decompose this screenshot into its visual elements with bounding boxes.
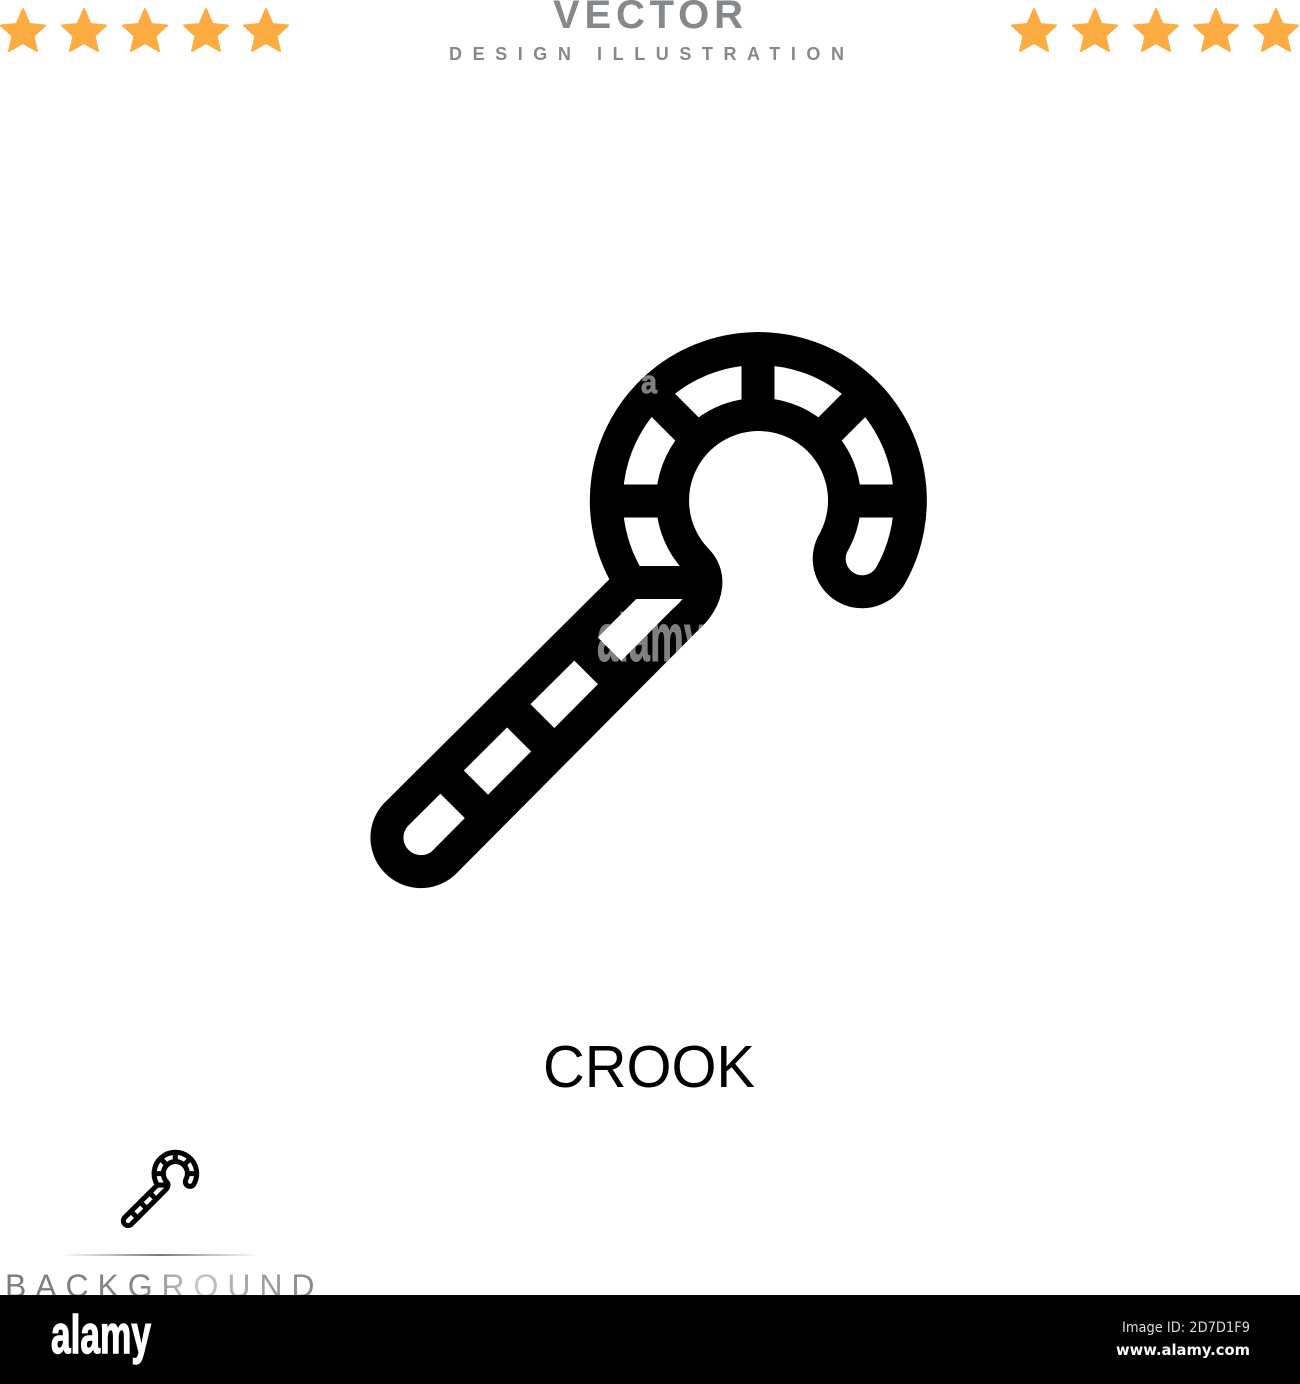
divider line	[60, 1254, 260, 1256]
website: www.alamy.com	[1116, 1341, 1250, 1359]
watermark fragments over icon: alamy	[597, 600, 705, 676]
label: BACKGROUND: BACKGROUND	[5, 1268, 323, 1304]
left star rating	[1, 9, 288, 51]
small crook icon	[123, 1152, 197, 1226]
image id: Image ID: 2D7D1F9	[1122, 1320, 1250, 1336]
subheading: DESIGN ILLUSTRATION: DESIGN ILLUSTRATION	[449, 44, 844, 64]
label: CROOK: CROOK	[543, 1034, 755, 1100]
right star rating	[1012, 9, 1298, 51]
watermark fragments over icon: a	[641, 364, 657, 400]
watermark fragments over icon	[597, 364, 705, 676]
bottom bar	[0, 1295, 1300, 1384]
alamy logo: alamy	[51, 1305, 151, 1365]
icon: crook	[387, 348, 911, 872]
